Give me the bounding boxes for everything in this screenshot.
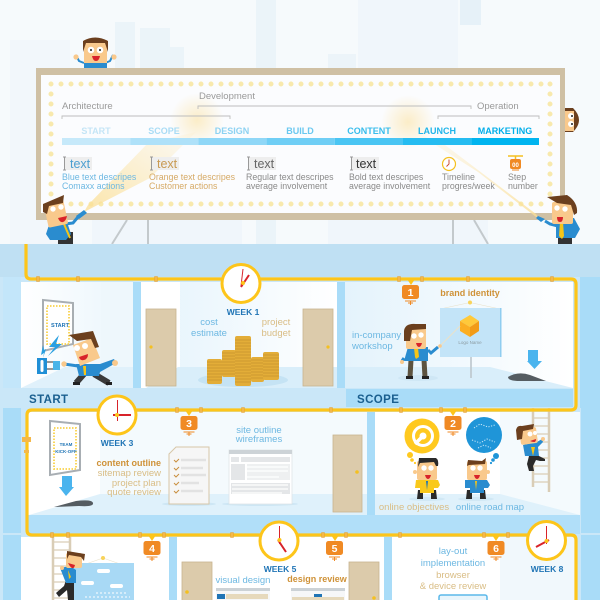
floor band 1 (0, 244, 600, 277)
text: brand identity: brand identity (440, 288, 500, 298)
text: week 8: WEEK 8 (531, 564, 564, 574)
text: in-company workshop: workshop (351, 341, 393, 352)
step badge 3: 3 (186, 418, 192, 430)
start label: START (29, 394, 68, 406)
billboard: start sign: START (51, 323, 70, 329)
timeline steps: LAUNCH (418, 126, 456, 136)
door (349, 562, 379, 600)
character peeking from billboard right (565, 108, 579, 132)
billboard marquee bulbs (49, 82, 552, 206)
coins shadow (198, 373, 288, 387)
path connector joints (22, 276, 554, 538)
text: site outline wireframes: wireframes (235, 434, 282, 445)
row 3 background (0, 534, 600, 600)
text: cost estimate: cost (200, 317, 218, 328)
door (333, 435, 362, 512)
text: online road map: online road map (456, 502, 524, 513)
clock: week 8 (528, 522, 566, 560)
icon: down arrow and hole (54, 476, 93, 507)
panel: start (21, 282, 133, 388)
phase label: operation: Operation (477, 101, 519, 112)
character: climbing with board (56, 551, 85, 600)
legend: blue text: text (70, 157, 91, 171)
text: content outline list: quote review (107, 487, 161, 498)
tablet device (439, 595, 487, 600)
pillar (337, 282, 345, 388)
timeline steps: BUILD (286, 126, 314, 136)
presentation board with logo (440, 300, 502, 378)
text: online objectives: online objectives (379, 502, 449, 513)
text: lay-out implementation: implementation (421, 558, 485, 569)
door left of scope (303, 309, 333, 386)
legend: blue text: Blue text descripes (62, 172, 137, 182)
door (146, 309, 176, 386)
legend: regular text: text (254, 157, 275, 171)
step badge 1 (402, 279, 419, 305)
legend: step number (508, 156, 538, 191)
flashlight beams (84, 93, 540, 220)
panel: online objectives and road map (375, 408, 580, 515)
presentation board with logo: Logo Name (458, 340, 482, 345)
sky background with skyline (0, 0, 600, 245)
legend: step number: Step (508, 172, 526, 182)
character with flashlight left (43, 195, 87, 244)
step badge 3 (180, 410, 198, 436)
character: thinking in blue (458, 458, 494, 501)
step badge 2: 2 (450, 418, 456, 430)
row 1 background band (0, 277, 600, 408)
step badge 2 (444, 410, 462, 436)
icon: lightning and plug (37, 335, 62, 374)
pillar (367, 412, 375, 515)
ladder (533, 408, 549, 492)
step badge 5 (326, 535, 343, 561)
timeline steps: DESIGN (215, 126, 249, 136)
legend: step number: number (508, 181, 538, 191)
sign: team kick-off: TEAM (60, 442, 73, 447)
text: project budget: budget (261, 328, 291, 339)
legend: orange text: Orange text descripes (149, 172, 236, 182)
thought bubble: road map (466, 417, 502, 464)
panel: week 1 budget (141, 282, 337, 388)
text: cost estimate: estimate (191, 328, 227, 339)
text: lay-out implementation: browser (436, 570, 470, 581)
character: plugging in (61, 331, 118, 385)
legend: timeline (442, 158, 495, 191)
door (182, 562, 212, 600)
timeline steps: SCOPE (148, 126, 180, 136)
text: design review: design review (287, 574, 348, 584)
sign: team kick-off (50, 421, 80, 475)
text: in-company workshop: in-company (352, 330, 401, 341)
character: climbing ladder (516, 424, 545, 471)
text: cost estimate (191, 317, 227, 339)
legend: timeline: Timeline (442, 172, 475, 182)
step badge 5: 5 (332, 543, 338, 555)
legend: bold text: average involvement (349, 181, 431, 191)
week 1 label: WEEK 1 (227, 307, 260, 317)
character: thinking in yellow (409, 458, 445, 501)
legend: orange text: Customer actions (149, 181, 218, 191)
text: week 5: WEEK 5 (264, 564, 297, 574)
legend: regular text: average involvement (246, 181, 328, 191)
clock: week 3 (98, 396, 136, 434)
text: visual design: visual design (216, 575, 270, 586)
billboard legs (112, 220, 488, 244)
panel: scope (303, 282, 573, 388)
sign: team kick-off: KICK-OFF (55, 449, 77, 454)
step badge 1: 1 (408, 287, 414, 299)
pillar (133, 282, 141, 388)
step badge 4: 4 (149, 543, 155, 555)
timeline steps: START (81, 126, 111, 136)
timeline steps (62, 126, 539, 145)
yellow process path (22, 244, 576, 600)
phase label: development: Development (199, 91, 255, 102)
text: project budget (261, 317, 291, 339)
text: in-company workshop (351, 330, 401, 352)
browser mock 1 (216, 588, 270, 600)
panel: week 3 content (27, 412, 367, 515)
text: project budget: project (262, 317, 291, 328)
clock: week 5 (260, 522, 298, 560)
thought bubble: target (404, 418, 440, 464)
row 2 background band (0, 408, 600, 535)
character peeking over billboard (73, 38, 117, 69)
legend: orange text: text (157, 157, 178, 171)
document checklist (162, 447, 216, 506)
clock: week 1 (222, 264, 260, 302)
scope label: SCOPE (357, 394, 399, 406)
wireframe window (222, 450, 298, 506)
text: lay-out implementation: lay-out (439, 546, 468, 557)
billboard (36, 68, 565, 220)
character: presenter (398, 324, 460, 381)
legend: step number: 00 (512, 163, 519, 169)
text: week 3 label: WEEK 3 (101, 438, 134, 448)
character with flashlight right (536, 195, 580, 244)
icon: down arrow and hole (508, 350, 546, 381)
timeline steps: MARKETING (478, 126, 532, 136)
legend: orange text (149, 157, 236, 191)
step badge 6: 6 (493, 543, 499, 555)
text: content outline list: content outline (96, 458, 161, 468)
chart: coin stacks (207, 336, 279, 386)
text: content outline list: sitemap review (98, 468, 161, 479)
text: site outline wireframes (235, 425, 282, 445)
legend: regular text (246, 157, 334, 191)
legend: bold text: text (356, 157, 377, 171)
step badge 4 (144, 535, 160, 561)
text: lay-out implementation (420, 546, 486, 592)
text: site outline wireframes: site outline (236, 425, 282, 436)
phase label: architecture: Architecture (62, 101, 113, 112)
text: content outline list (96, 458, 161, 498)
legend: regular text: Regular text descripes (246, 172, 334, 182)
browser mock 2 (291, 588, 345, 600)
legend: timeline: progres/week (442, 181, 495, 191)
sitemap board (73, 556, 134, 600)
step badge 6 (488, 535, 504, 561)
timeline steps: CONTENT (347, 126, 391, 136)
legend: bold text: Bold text descripes (349, 172, 424, 182)
legend: blue text: Comaxx actions (62, 181, 125, 191)
scope band (346, 389, 573, 407)
phase brackets (62, 106, 539, 119)
text: lay-out implementation: & device review (420, 581, 486, 592)
legend: bold text (349, 157, 431, 191)
legend: blue text (62, 157, 137, 191)
ladder row 3 (53, 535, 70, 600)
text: content outline list: project plan (112, 478, 161, 489)
